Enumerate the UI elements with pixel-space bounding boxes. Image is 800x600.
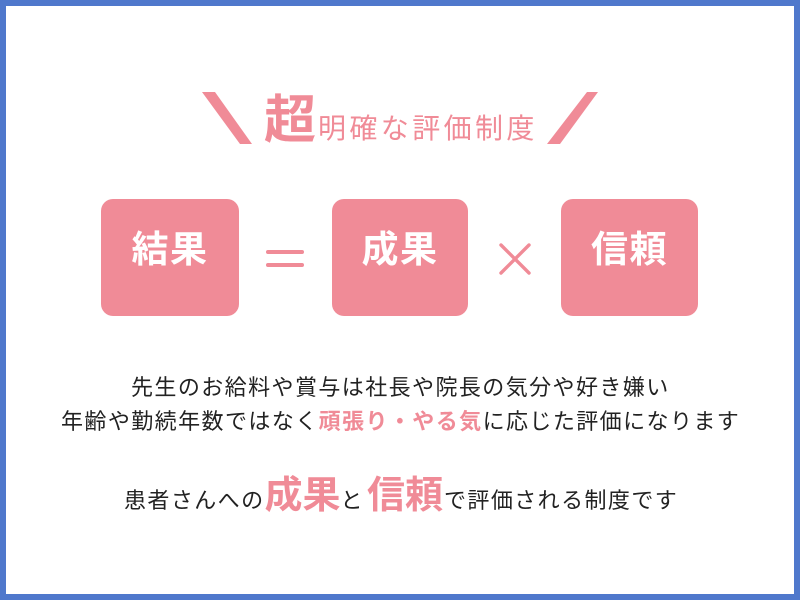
box: trust: 信頼 (591, 229, 668, 270)
icon: equals sign (266, 250, 304, 267)
text line 1: 先生のお給料や賞与は社長や院長の気分や好き嫌い (131, 375, 670, 400)
box: result (101, 199, 239, 316)
heading text: 明確な評価制度 (318, 113, 538, 144)
text line 2: 年齢や勤続年数ではなく頑張り・やる気に応じた評価になります (61, 409, 740, 434)
box: result: 結果 (132, 229, 208, 270)
box: achievement (332, 199, 468, 316)
icon: multiplication sign (499, 243, 531, 275)
title (202, 92, 598, 150)
box: achievement: 成果 (362, 229, 438, 270)
left slash (202, 92, 252, 144)
text line 3: 患者さんへの成果と信頼で評価される制度です (124, 475, 678, 517)
heading emphasis: 超 (264, 92, 316, 150)
right slash (547, 92, 598, 144)
box: trust (561, 199, 698, 316)
